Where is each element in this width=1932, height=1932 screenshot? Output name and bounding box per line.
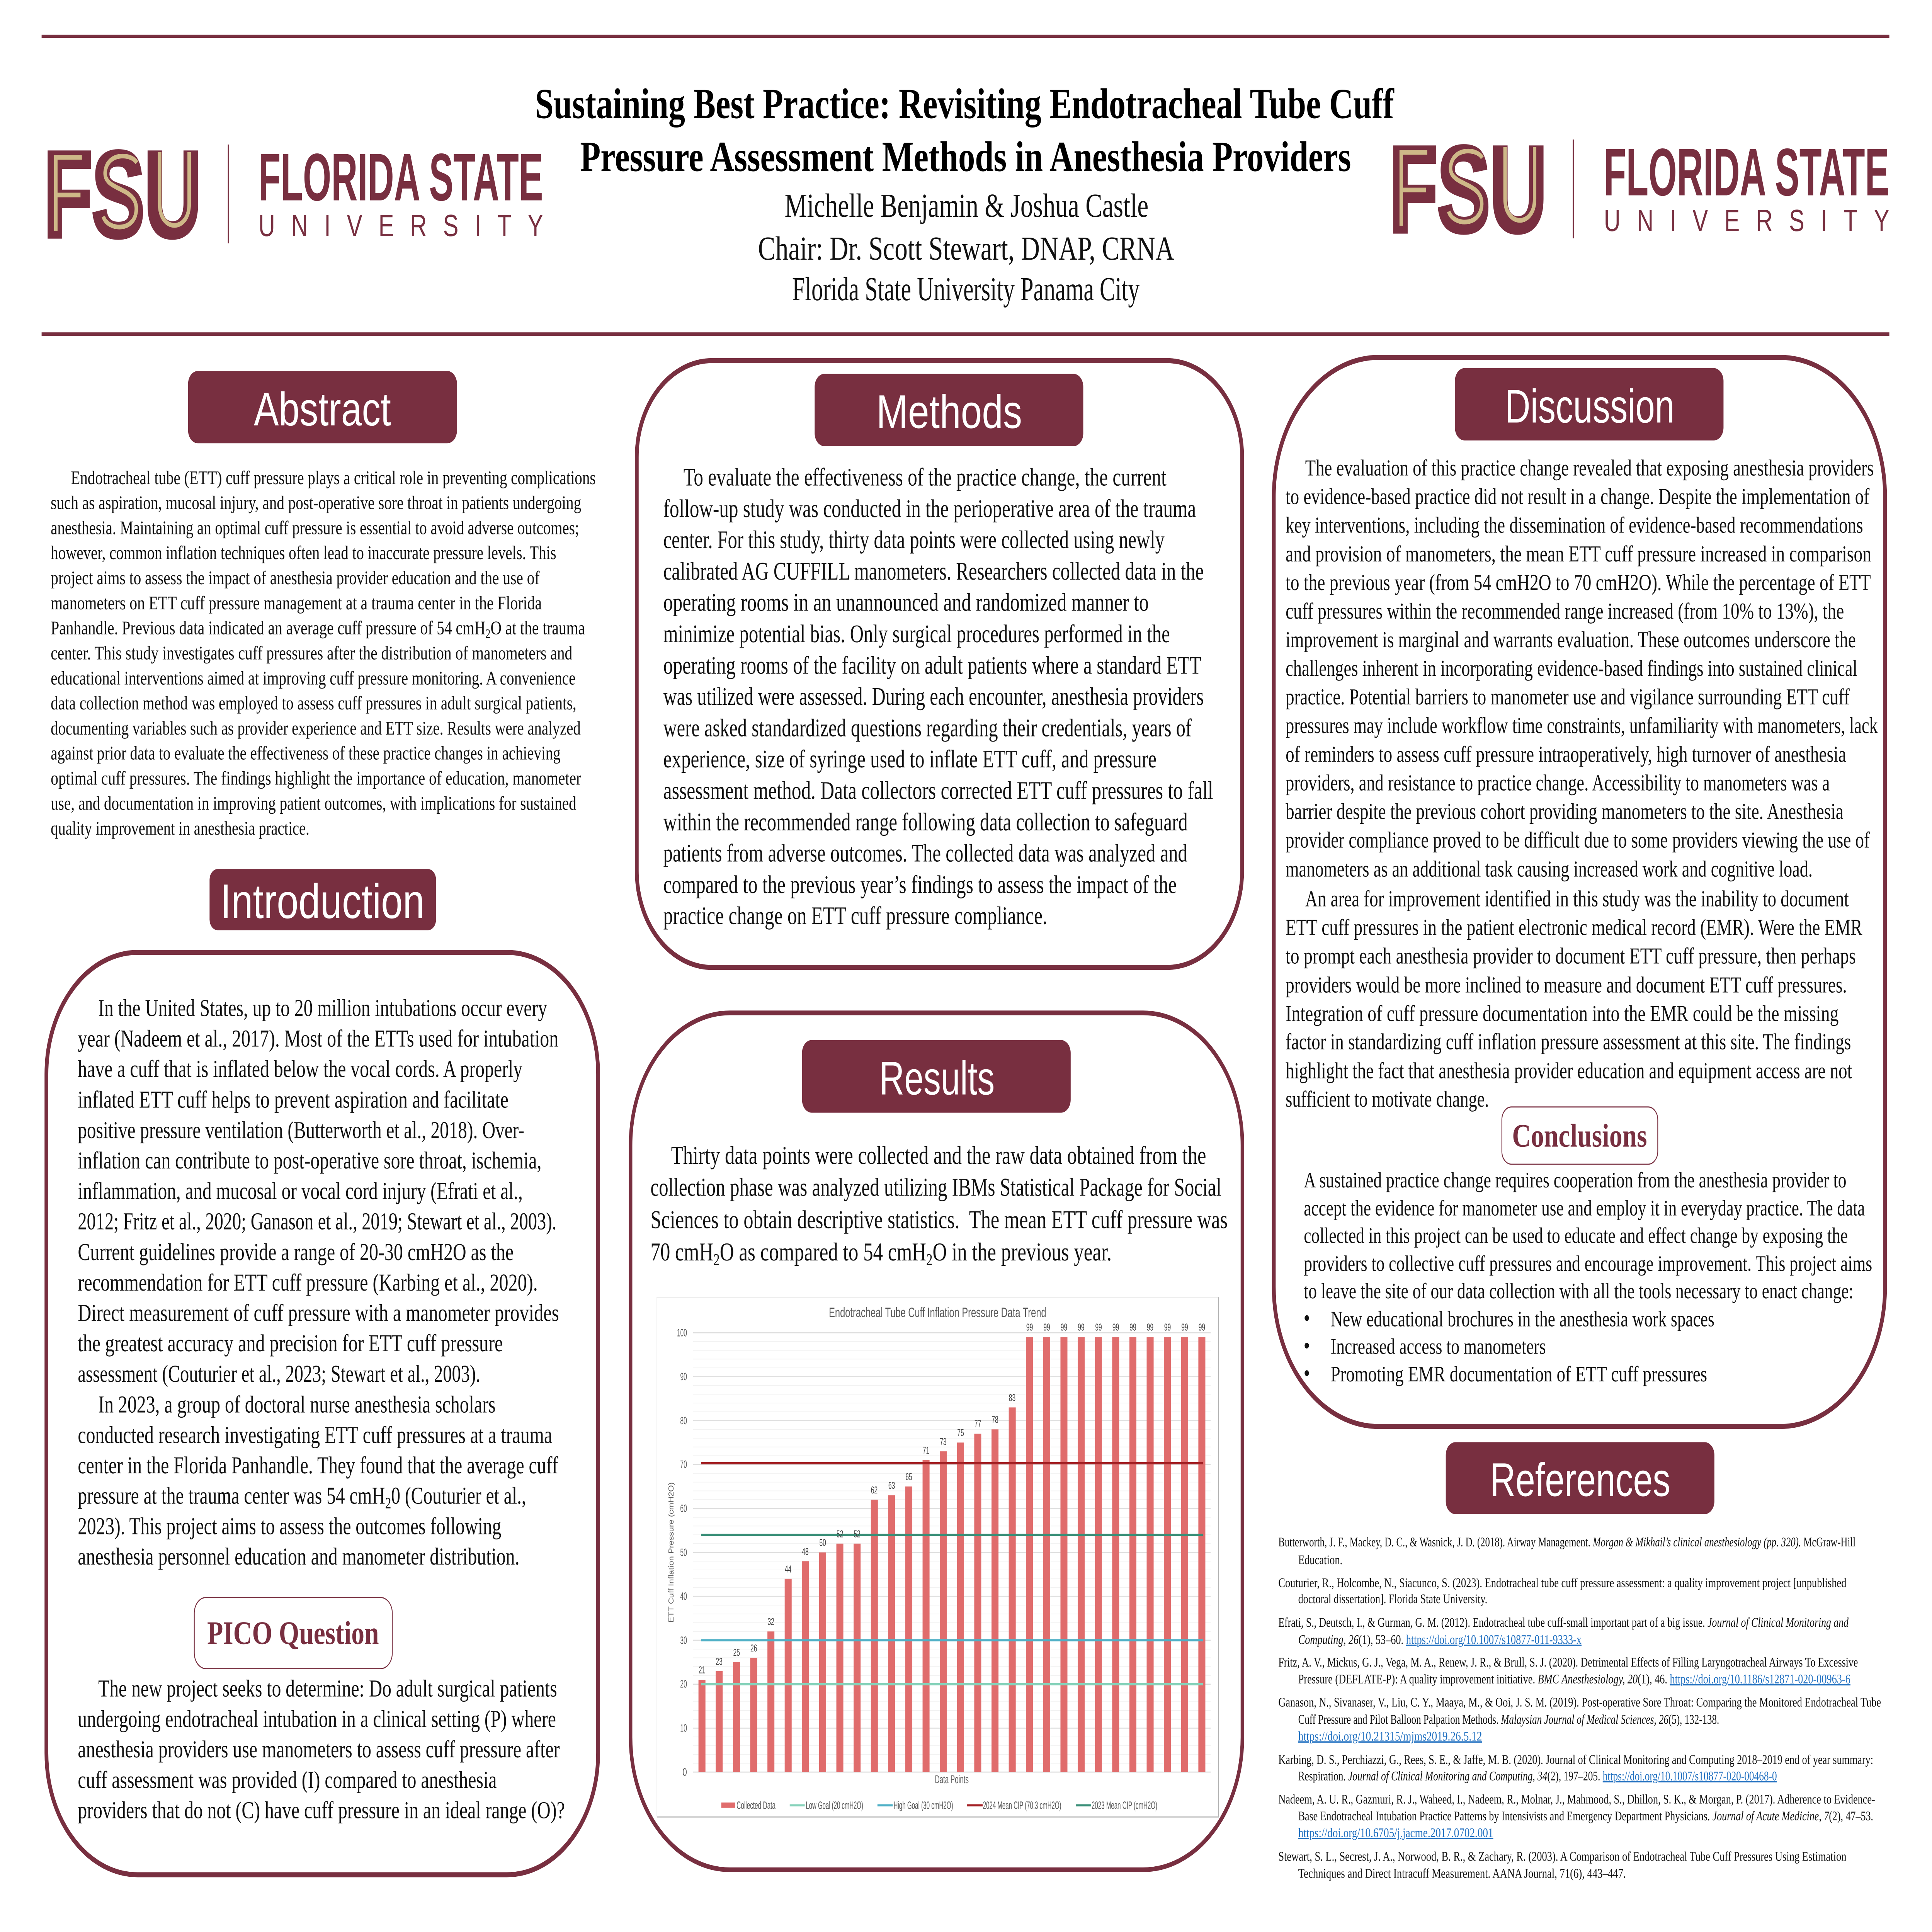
heading: Methods bbox=[815, 374, 1083, 446]
y axis tick labels bbox=[677, 1327, 687, 1778]
text block: PICO question: anesthesia providers use manometers to assess cuff pressure after bbox=[78, 1736, 560, 1763]
y axis tick labels: 80 bbox=[680, 1415, 687, 1427]
text block: references list: Stewart, S. L., Secrest, J. A., Norwood, B. R., & Zachary, R. (2003). A Comparison of Endotracheal Tube Cuff Pressures Using Estimation bbox=[1278, 1849, 1846, 1864]
text block: abstract body: quality improvement in anesthesia practice. bbox=[51, 818, 310, 839]
text block: introduction body bbox=[78, 994, 559, 1570]
heading: Conclusions bbox=[1502, 1107, 1658, 1164]
text block: references list: https://doi.org/10.21315/mjms2019.26.5.12 bbox=[1298, 1729, 1482, 1744]
bar value labels: 99 bbox=[1112, 1321, 1119, 1333]
text block: methods body: patients from adverse outcomes. The collected data was analyzed and bbox=[663, 839, 1187, 867]
text block: introduction body: inflation can contribute to post-operative sore throat, ischemia, bbox=[78, 1147, 541, 1174]
text block: discussion body: key interventions, including the dissemination of evidence-based recommendations bbox=[1286, 512, 1863, 538]
text block: methods body: center. For this study, thirty data points were collected using newly bbox=[663, 526, 1165, 554]
bar value labels: 23 bbox=[716, 1656, 723, 1667]
heading: Results bbox=[802, 1040, 1071, 1113]
y axis tick labels: 20 bbox=[680, 1679, 687, 1690]
text block: abstract body: documenting variables such as provider experience and ETT size. Results were analyzed bbox=[51, 717, 581, 739]
text block: introduction body: 0 (Couturier et al., bbox=[391, 1482, 526, 1509]
text block: conclusions body: collected in this project can be used to educate and effect change by exposing the bbox=[1304, 1224, 1848, 1248]
text block: PICO question: cuff assessment was provided (I) compared to anesthesia bbox=[78, 1766, 497, 1793]
heading: Methods: Methods bbox=[876, 385, 1022, 438]
text block: introduction body: conducted research investigating ETT cuff pressures at a trauma bbox=[78, 1421, 552, 1448]
text block: results body: O in the previous year. bbox=[932, 1238, 1112, 1266]
logo: FSU left: UNIVERSITY bbox=[259, 209, 543, 243]
text block: references list: Respiration. Journal of Clinical Monitoring and Computing, 34(2), 197–205. https://doi.org/10.1007/s10877-020-00468-0 bbox=[1298, 1769, 1777, 1784]
text block: methods body: experience, size of syringe used to inflate ETT cuff, and pressure bbox=[663, 745, 1156, 773]
bar value labels: 44 bbox=[785, 1563, 791, 1575]
bar value labels: 99 bbox=[1026, 1321, 1033, 1333]
text block: results body: 2 bbox=[926, 1250, 932, 1269]
text block: references list: Base Endotracheal Intubation Practice Patterns by Intensivists and Emergency Department Physicians. Journal of Acute Medicine, 7(2), 47–53. bbox=[1298, 1809, 1873, 1823]
title block: Michelle Benjamin & Joshua Castle bbox=[785, 187, 1148, 224]
logo: FSU right bbox=[1389, 122, 1889, 257]
bar chart: cuff inflation pressure data trend bbox=[657, 1297, 1219, 1818]
text block: discussion body: An area for improvement identified in this study was the inability to document bbox=[1305, 886, 1849, 911]
bar value labels bbox=[699, 1321, 1205, 1675]
bar value labels: 48 bbox=[802, 1546, 809, 1557]
text block: results body: Sciences to obtain descriptive statistics. The mean ETT cuff pressure was bbox=[650, 1205, 1228, 1234]
logo: FSU left: FLORIDA STATE bbox=[259, 139, 543, 215]
text block: discussion body bbox=[1286, 455, 1878, 1112]
text block: introduction body: anesthesia personnel education and manometer distribution. bbox=[78, 1543, 519, 1570]
text block: introduction body: assessment (Couturier et al., 2023; Stewart et al., 2003). bbox=[78, 1360, 480, 1387]
text block: references list: Butterworth, J. F., Mackey, D. C., & Wasnick, J. D. (2018). Airway Management. Morgan & Mikhail’s clinical anesthesiology (pp. 320). McGraw-Hill bbox=[1278, 1535, 1855, 1549]
panel: discussion and conclusions bbox=[1274, 357, 1885, 1427]
text block: discussion body: practice. Potential barriers to manometer use and vigilance surrounding ETT cuff bbox=[1286, 684, 1850, 709]
text block: conclusions body: A sustained practice change requires cooperation from the anesthesia provider to bbox=[1304, 1168, 1846, 1192]
bar value labels: 99 bbox=[1095, 1321, 1102, 1333]
text block: references list bbox=[1278, 1535, 1881, 1881]
bar value labels: 99 bbox=[1181, 1321, 1188, 1333]
text block: introduction body: have a cuff that is inflated below the vocal cords. A properly bbox=[78, 1055, 522, 1082]
y axis tick labels: 40 bbox=[680, 1591, 687, 1602]
text block: conclusions body: providers to collective cuff pressures and encourage improvement. This project aims bbox=[1304, 1252, 1872, 1276]
text block: introduction body: positive pressure ventilation (Butterworth et al., 2018). Over- bbox=[78, 1116, 524, 1143]
text block: discussion body: sufficient to motivate change. bbox=[1286, 1086, 1489, 1112]
text block: references list: Education. bbox=[1298, 1553, 1342, 1567]
text block: references list: doctoral dissertation]. Florida State University. bbox=[1298, 1592, 1487, 1606]
y axis tick labels: 10 bbox=[680, 1722, 687, 1734]
bar value labels: 75 bbox=[957, 1427, 964, 1438]
text block: references list: Nadeem, A. U. R., Gazmuri, R. J., Waheed, I., Nadeem, R., Molnar, J., Mahmood, S., Dhillon, S. K., & Morgan, P. (2017). Adherence to Evidence- bbox=[1278, 1792, 1875, 1807]
text block: methods body: To evaluate the effectiveness of the practice change, the current bbox=[684, 463, 1167, 491]
text block: discussion body: improvement is marginal and warrants evaluation. These outcomes underscore the bbox=[1286, 627, 1856, 652]
text block: abstract body: optimal cuff pressures. The findings highlight the importance of education, manometer bbox=[51, 767, 581, 789]
panel: results bbox=[631, 1013, 1242, 1870]
text block: references list: https://doi.org/10.6705/j.jacme.2017.0702.001 bbox=[1298, 1826, 1493, 1840]
x axis title: Data Points bbox=[935, 1773, 969, 1786]
text block: abstract body: data collection method was employed to assess cuff pressures in adult surgical patients, bbox=[51, 692, 577, 714]
text block: introduction body: the greatest accuracy and precision for ETT cuff pressure bbox=[78, 1330, 503, 1357]
text block: introduction body: 2023). This project aims to assess the outcomes following bbox=[78, 1512, 501, 1539]
text block: discussion body: to the previous year (from 54 cmH2O to 70 cmH2O). While the percentage of ETT bbox=[1286, 570, 1871, 595]
chart title: Endotracheal Tube Cuff Inflation Pressure Data Trend bbox=[829, 1305, 1046, 1320]
text block: references list: Cuff Pressure and Pilot Balloon Palpation Methods. Malaysian Journal of Medical Sciences, 26(5), 132-138. bbox=[1298, 1712, 1719, 1727]
heading: Discussion: Discussion bbox=[1505, 380, 1674, 432]
title block bbox=[535, 80, 1395, 308]
title block: Chair: Dr. Scott Stewart, DNAP, CRNA bbox=[758, 230, 1174, 267]
bar value labels: 99 bbox=[1164, 1321, 1171, 1333]
text block: abstract body: such as aspiration, mucosal injury, and post-operative sore throat in patients undergoing bbox=[51, 492, 581, 514]
text block: introduction body: recommendation for ETT cuff pressure (Karbing et al., 2020). bbox=[78, 1269, 538, 1296]
bulleted list: actions: New educational brochures in the anesthesia work spaces bbox=[1331, 1307, 1714, 1331]
bulleted list: actions bbox=[1304, 1307, 1714, 1386]
text block: methods body: within the recommended range following data collection to safeguard bbox=[663, 808, 1188, 836]
bar value labels: 63 bbox=[888, 1480, 895, 1491]
text block: results body: 70 cmH bbox=[650, 1238, 712, 1266]
bulleted list: actions: Promoting EMR documentation of ETT cuff pressures bbox=[1331, 1362, 1707, 1386]
text block: abstract body: against prior data to evaluate the effectiveness of these practice changes in achieving bbox=[51, 742, 561, 764]
bar value labels: 78 bbox=[992, 1414, 998, 1425]
text block: conclusions body: to leave the site of our data collection with all the tools necessary to enact change: bbox=[1304, 1279, 1854, 1303]
title block: Pressure Assessment Methods in Anesthesia Providers bbox=[580, 133, 1351, 180]
text block: discussion body: providers would be more inclined to measure and document ETT cuff pressures. bbox=[1286, 972, 1847, 997]
text block: methods body: was utilized were assessed. During each encounter, anesthesia providers bbox=[663, 683, 1204, 711]
y axis tick labels: 0 bbox=[682, 1766, 687, 1778]
chart legend: Collected Data bbox=[736, 1799, 776, 1811]
logo: FSU left bbox=[44, 127, 543, 262]
y axis tick labels: 70 bbox=[680, 1459, 687, 1471]
text block: discussion body: barrier despite the previous cohort providing manometers to the site. Anesthesia bbox=[1286, 799, 1844, 824]
chart legend: High Goal (30 cmH2O) bbox=[893, 1799, 953, 1811]
text block: introduction body: center in the Florida Panhandle. They found that the average cuff bbox=[78, 1451, 558, 1479]
bar value labels: 99 bbox=[1043, 1321, 1050, 1333]
text block: methods body: operating rooms of the facility on adult patients where a standard ETT bbox=[663, 651, 1201, 679]
text block: abstract body: project aims to assess the impact of anesthesia provider education and the use of bbox=[51, 567, 540, 588]
bar value labels: 52 bbox=[854, 1529, 861, 1539]
bar value labels: 52 bbox=[837, 1529, 843, 1539]
text block: discussion body: factor in standardizing cuff inflation pressure assessment at this site. The findings bbox=[1286, 1029, 1851, 1054]
text block: abstract body bbox=[51, 467, 596, 839]
text block: introduction body: inflammation, and mucosal or vocal cord injury (Efrati et al., bbox=[78, 1177, 523, 1204]
text block: introduction body: In 2023, a group of doctoral nurse anesthesia scholars bbox=[98, 1391, 496, 1418]
text block: introduction body: In the United States, up to 20 million intubations occur every bbox=[98, 994, 547, 1022]
text block: abstract body: center. This study investigates cuff pressures after the distribution of manometers and bbox=[51, 642, 572, 664]
text block: results body bbox=[650, 1141, 1228, 1269]
bar value labels: 21 bbox=[699, 1664, 705, 1675]
y axis title: ETT Cuff Inflation Pressure (cmH2O) bbox=[667, 1482, 675, 1622]
text block: introduction body: Direct measurement of cuff pressure with a manometer provides bbox=[78, 1299, 559, 1326]
chart legend: 2023 Mean CIP (cmH2O) bbox=[1092, 1799, 1157, 1811]
chart legend bbox=[721, 1799, 1157, 1811]
text block: results body: Thirty data points were collected and the raw data obtained from the bbox=[671, 1141, 1206, 1170]
text block: discussion body: cuff pressures within the recommended range increased (from 10% to 13%), the bbox=[1286, 598, 1844, 624]
panel: introduction bbox=[46, 952, 598, 1875]
text block: abstract body: anesthesia. Maintaining an optimal cuff pressure is essential to avoid adverse outcomes; bbox=[51, 517, 579, 539]
bar value labels: 65 bbox=[905, 1471, 912, 1482]
text block: introduction body: pressure at the trauma center was 54 cmH bbox=[78, 1482, 383, 1509]
heading: PICO Question: PICO Question bbox=[207, 1615, 379, 1651]
bar value labels: 71 bbox=[923, 1445, 929, 1456]
text block: references list: Pressure (DEFLATE-P): A quality improvement initiative. BMC Anesthesiology, 20(1), 46. https://doi.org/10.1186/s12871-020-00963-6 bbox=[1298, 1672, 1850, 1687]
text block: references list: Karbing, D. S., Perchiazzi, G., Rees, S. E., & Jaffe, M. B. (2020). Journal of Clinical Monitoring and Computing 2018–2019 end of year summary: bbox=[1278, 1752, 1873, 1767]
text block: references list: Techniques and Direct Intracuff Measurement. AANA Journal, 71(6), 443–447. bbox=[1298, 1866, 1626, 1881]
text block: conclusions body: accept the evidence for manometer use and employ it in everyday practice. The data bbox=[1304, 1196, 1865, 1220]
text block: PICO question: The new project seeks to determine: Do adult surgical patients bbox=[98, 1675, 557, 1702]
text block: PICO question: providers that do not (C) have cuff pressure in an ideal range (O)? bbox=[78, 1796, 565, 1823]
y axis tick labels: 90 bbox=[680, 1371, 687, 1383]
text block: introduction body: Current guidelines provide a range of 20-30 cmH2O as the bbox=[78, 1238, 514, 1265]
panel: methods bbox=[637, 361, 1242, 968]
heading: References bbox=[1446, 1442, 1714, 1514]
text block: methods body: compared to the previous year’s findings to assess the impact of the bbox=[663, 871, 1177, 899]
text block: methods body: follow-up study was conducted in the perioperative area of the trauma bbox=[663, 495, 1196, 523]
bar value labels: 99 bbox=[1129, 1321, 1136, 1333]
text block: discussion body: to evidence-based practice did not result in a change. Despite the implementation of bbox=[1286, 484, 1870, 509]
panel: abstract bbox=[51, 371, 596, 839]
text block: abstract body: Endotracheal tube (ETT) cuff pressure plays a critical role in preventing complications bbox=[71, 467, 596, 488]
heading: Abstract: Abstract bbox=[254, 383, 391, 435]
text block: discussion body: challenges inherent in incorporating evidence-based findings into sustained clinical bbox=[1286, 655, 1857, 681]
heading: Discussion bbox=[1455, 368, 1723, 440]
text block: references list: Ganason, N., Sivanaser, V., Liu, C. Y., Maaya, M., & Ooi, J. S. M. (2019). Post-operative Sore Throat: Comparing the Monitored Endotracheal Tube bbox=[1278, 1695, 1881, 1710]
text block: discussion body: providers, and resistance to practice change. Accessibility to manometers was a bbox=[1286, 770, 1830, 795]
text block: abstract body: 2 bbox=[485, 626, 490, 641]
text block: methods body: calibrated AG CUFFILL manometers. Researchers collected data in the bbox=[663, 558, 1204, 585]
heading: PICO Question bbox=[194, 1597, 392, 1669]
text block: references list: Efrati, S., Deutsch, I., & Gurman, G. M. (2012). Endotracheal tube cuff-small important part of a big issue. Journal of Clinical Monitoring and bbox=[1278, 1616, 1849, 1630]
chart legend: 2024 Mean CIP (70.3 cmH2O) bbox=[983, 1799, 1061, 1811]
text block: introduction body: 2012; Fritz et al., 2020; Ganason et al., 2019; Stewart et al., 2003). bbox=[78, 1208, 556, 1235]
text block: methods body bbox=[663, 463, 1213, 930]
text block: introduction body: inflated ETT cuff helps to prevent aspiration and facilitate bbox=[78, 1086, 509, 1113]
text block: methods body: practice change on ETT cuff pressure compliance. bbox=[663, 902, 1047, 930]
bulleted list: actions: Increased access to manometers bbox=[1331, 1335, 1546, 1359]
y axis tick labels: 60 bbox=[680, 1503, 687, 1514]
text block: results body: 2 bbox=[713, 1250, 720, 1269]
logo: FSU left: FSU bbox=[44, 127, 201, 262]
text block: PICO question bbox=[78, 1675, 565, 1823]
bar value labels: 25 bbox=[733, 1647, 740, 1658]
heading: Conclusions: Conclusions bbox=[1512, 1117, 1647, 1154]
bar value labels: 99 bbox=[1061, 1321, 1067, 1333]
logo: FSU right: FSU bbox=[1389, 122, 1547, 257]
bar value labels: 50 bbox=[819, 1537, 826, 1548]
text block: abstract body: O at the trauma bbox=[490, 617, 585, 639]
text block: discussion body: pressures may include workflow time constraints, unfamiliarity with manometers, lack bbox=[1286, 713, 1878, 738]
text block: discussion body: The evaluation of this practice change revealed that exposing anesthesia providers bbox=[1305, 455, 1874, 481]
bar value labels: 62 bbox=[871, 1485, 878, 1495]
title block: Florida State University Panama City bbox=[792, 270, 1139, 308]
text block: results body: O as compared to 54 cmH bbox=[720, 1238, 926, 1266]
bar value labels: 99 bbox=[1199, 1321, 1205, 1333]
bar value labels: 26 bbox=[750, 1643, 757, 1654]
text block: discussion body: and provision of manometers, the mean ETT cuff pressure increased in comparison bbox=[1286, 541, 1871, 566]
text block: methods body: were asked standardized questions regarding their credentials, years of bbox=[663, 714, 1192, 742]
text block: methods body: minimize potential bias. Only surgical procedures performed in the bbox=[663, 620, 1170, 648]
text block: introduction body: year (Nadeem et al., 2017). Most of the ETTs used for intubation bbox=[78, 1025, 558, 1052]
bar value labels: 99 bbox=[1147, 1321, 1153, 1333]
text block: abstract body: Panhandle. Previous data indicated an average cuff pressure of 54 cmH bbox=[51, 617, 464, 639]
text block: conclusions body bbox=[1304, 1168, 1872, 1303]
chart legend: Low Goal (20 cmH2O) bbox=[806, 1799, 863, 1811]
text block: abstract body: manometers on ETT cuff pressure management at a trauma center in the Florida bbox=[51, 592, 542, 614]
text block: discussion body: to prompt each anesthesia provider to document ETT cuff pressure, then perhaps bbox=[1286, 943, 1856, 968]
bar value labels: 83 bbox=[1009, 1392, 1015, 1403]
logo: FSU right: UNIVERSITY bbox=[1604, 204, 1889, 238]
bar value labels: 32 bbox=[767, 1616, 774, 1627]
text block: abstract body: however, common inflation techniques often lead to inaccurate pressure levels. This bbox=[51, 542, 556, 563]
title block: Sustaining Best Practice: Revisiting Endotracheal Tube Cuff bbox=[535, 80, 1395, 128]
heading: Abstract bbox=[188, 371, 457, 443]
y axis tick labels: 100 bbox=[677, 1327, 687, 1339]
text block: results body: collection phase was analyzed utilizing IBMs Statistical Package for Social bbox=[650, 1173, 1221, 1201]
text block: methods body: assessment method. Data collectors corrected ETT cuff pressures to fall bbox=[663, 777, 1213, 804]
y axis tick labels: 50 bbox=[680, 1547, 687, 1558]
heading: References: References bbox=[1490, 1453, 1670, 1506]
text block: methods body: operating rooms in an unannounced and randomized manner to bbox=[663, 588, 1149, 616]
text block: discussion body: Integration of cuff pressure documentation into the EMR could be the missing bbox=[1286, 1001, 1838, 1026]
bar value labels: 73 bbox=[940, 1436, 947, 1447]
text block: PICO question: undergoing endotracheal intubation in a clinical setting (P) where bbox=[78, 1705, 556, 1732]
text block: introduction body: 2 bbox=[385, 1495, 391, 1512]
bar value labels: 77 bbox=[975, 1418, 981, 1429]
text block: discussion body: of reminders to assess cuff pressure intraoperatively, high turnover of anesthesia bbox=[1286, 742, 1846, 767]
text block: discussion body: provider compliance proved to be difficult due to some providers viewing the use of bbox=[1286, 827, 1870, 852]
bar value labels: 99 bbox=[1078, 1321, 1085, 1333]
heading: Introduction: Introduction bbox=[220, 874, 425, 929]
text block: references list: Computing, 26(1), 53–60. https://doi.org/10.1007/s10877-011-9333-x bbox=[1298, 1633, 1582, 1647]
text block: discussion body: highlight the fact that anesthesia provider education and equipment access are not bbox=[1286, 1058, 1852, 1083]
text block: abstract body: use, and documentation in improving patient outcomes, with implications for sustained bbox=[51, 793, 577, 814]
text block: references list: Couturier, R., Holcombe, N., Siacunco, S. (2023). Endotracheal tube cuff pressure assessment: a quality improvement project [unpublished bbox=[1278, 1576, 1847, 1590]
bars bbox=[699, 1337, 1205, 1772]
text block: references list: Fritz, A. V., Mickus, G. J., Vega, M. A., Renew, J. R., & Brull, S. J. (2020). Detrimental Effects of Filling Laryngotracheal Airways To Excessive bbox=[1278, 1655, 1858, 1670]
text block: discussion body: ETT cuff pressures in the patient electronic medical record (EMR). Were the EMR bbox=[1286, 915, 1862, 940]
heading: Results: Results bbox=[879, 1052, 995, 1104]
reference lines bbox=[701, 1463, 1203, 1684]
text block: discussion body: manometers as an additional task causing increased work and cognitive load. bbox=[1286, 856, 1813, 881]
y axis tick labels: 30 bbox=[680, 1635, 687, 1646]
text block: abstract body: educational interventions aimed at improving cuff pressure monitoring. A convenience bbox=[51, 667, 576, 689]
